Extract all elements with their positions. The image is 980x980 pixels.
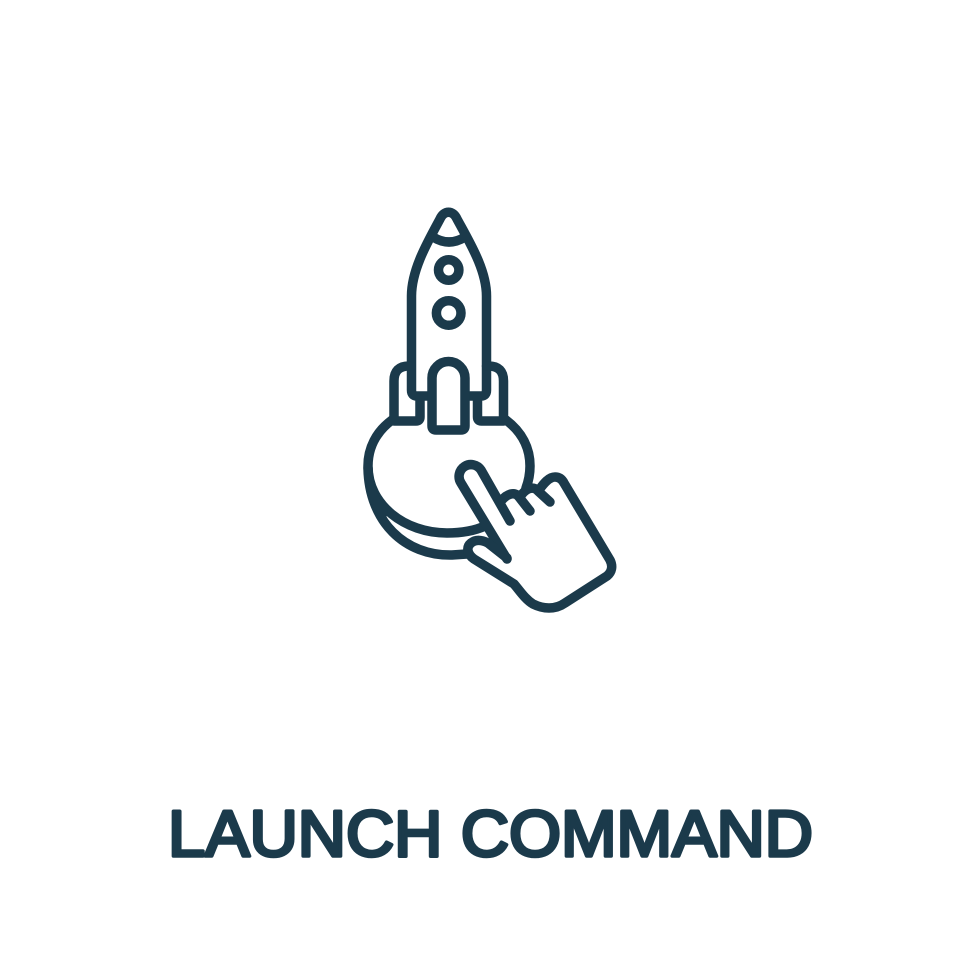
icon: launch command [368,212,612,608]
icon: rocket [394,212,504,430]
icon: pointing hand [459,465,612,608]
icon: launch button [368,420,530,555]
title: LAUNCH COMMAND [168,797,813,870]
